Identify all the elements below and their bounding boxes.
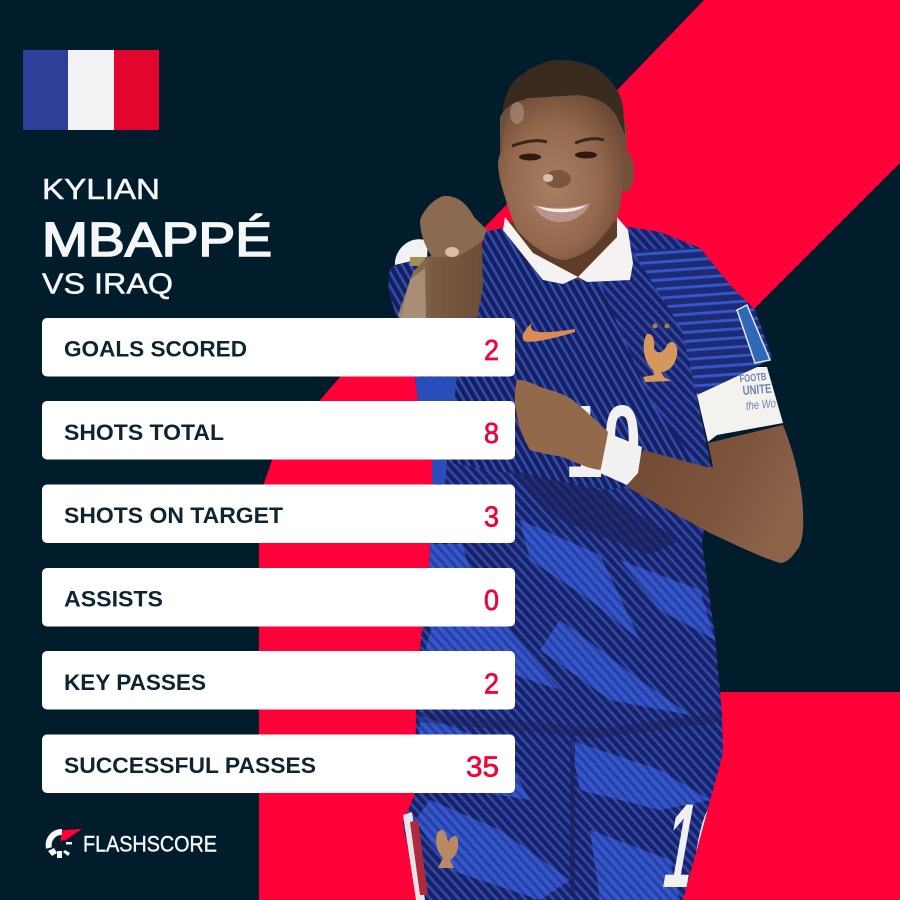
pointing forearm: [398, 243, 483, 320]
stat row: successful passes: SUCCESSFUL PASSES: [64, 753, 316, 778]
pointing hand: [420, 196, 487, 257]
head: [498, 60, 634, 260]
stat row: goals scored: GOALS SCORED: [64, 336, 247, 362]
first name: KYLIAN: [42, 174, 160, 206]
icon: speedometer: [48, 829, 82, 858]
eyes: [519, 154, 541, 160]
stat row: key passes: KEY PASSES: [64, 670, 206, 695]
stat row: shots total: SHOTS TOTAL: [64, 420, 224, 445]
rooster crest: [643, 324, 677, 382]
stat row: assists: 0: [484, 585, 499, 617]
stat row: shots on target: [42, 484, 515, 543]
armband slogan: FOOTB: [739, 371, 767, 385]
swoosh logo: [523, 323, 575, 342]
ear: [618, 152, 634, 192]
armband slogan: UNITE: [742, 381, 772, 398]
clenched fist: [515, 380, 608, 470]
right upper arm and forearm: [627, 425, 803, 563]
red angular background shape: [259, 0, 900, 900]
armband: [697, 367, 783, 442]
stat row: successful passes: [42, 734, 515, 793]
jersey and shorts: [403, 226, 772, 900]
player cut-out illustration: [388, 60, 803, 900]
opponent: VS IRAQ: [42, 268, 173, 300]
stat row: assists: ASSISTS: [64, 586, 163, 612]
shirt number: 10: [565, 384, 641, 499]
nose: [543, 170, 571, 188]
stat row: key passes: 2: [484, 668, 499, 700]
surname: MBAPPÉ: [42, 214, 272, 267]
stat row: shots on target: SHOTS ON TARGET: [64, 503, 283, 528]
stat row: shots total: [42, 401, 515, 460]
eyebrows: [512, 139, 604, 146]
face: [498, 95, 623, 260]
hair: [503, 60, 625, 135]
neck: [507, 222, 630, 280]
stat row: assists: [42, 568, 515, 626]
smile: [533, 203, 590, 222]
stat row: successful passes: 35: [466, 752, 499, 784]
forehead highlight: [510, 102, 524, 124]
Flashscore logo: [48, 829, 217, 858]
hair fade: [500, 100, 627, 160]
stat row: goals scored: 2: [484, 335, 499, 367]
France flag: [23, 50, 159, 130]
white collar: [503, 217, 633, 284]
shorts rooster crest: [436, 830, 458, 868]
wristband: [600, 433, 642, 485]
stat row: goals scored: [42, 318, 515, 376]
sleeve badge: [737, 305, 770, 363]
armband slogan: [739, 370, 777, 413]
player name: [42, 174, 272, 300]
stat row: shots on target: 3: [484, 502, 499, 534]
armband slogan: the Wo: [745, 396, 777, 413]
left sleeve: [388, 239, 430, 320]
wordmark: FLASHSCORE: [83, 832, 217, 856]
stat row: shots total: 8: [484, 418, 499, 450]
stat row: key passes: [42, 651, 515, 710]
